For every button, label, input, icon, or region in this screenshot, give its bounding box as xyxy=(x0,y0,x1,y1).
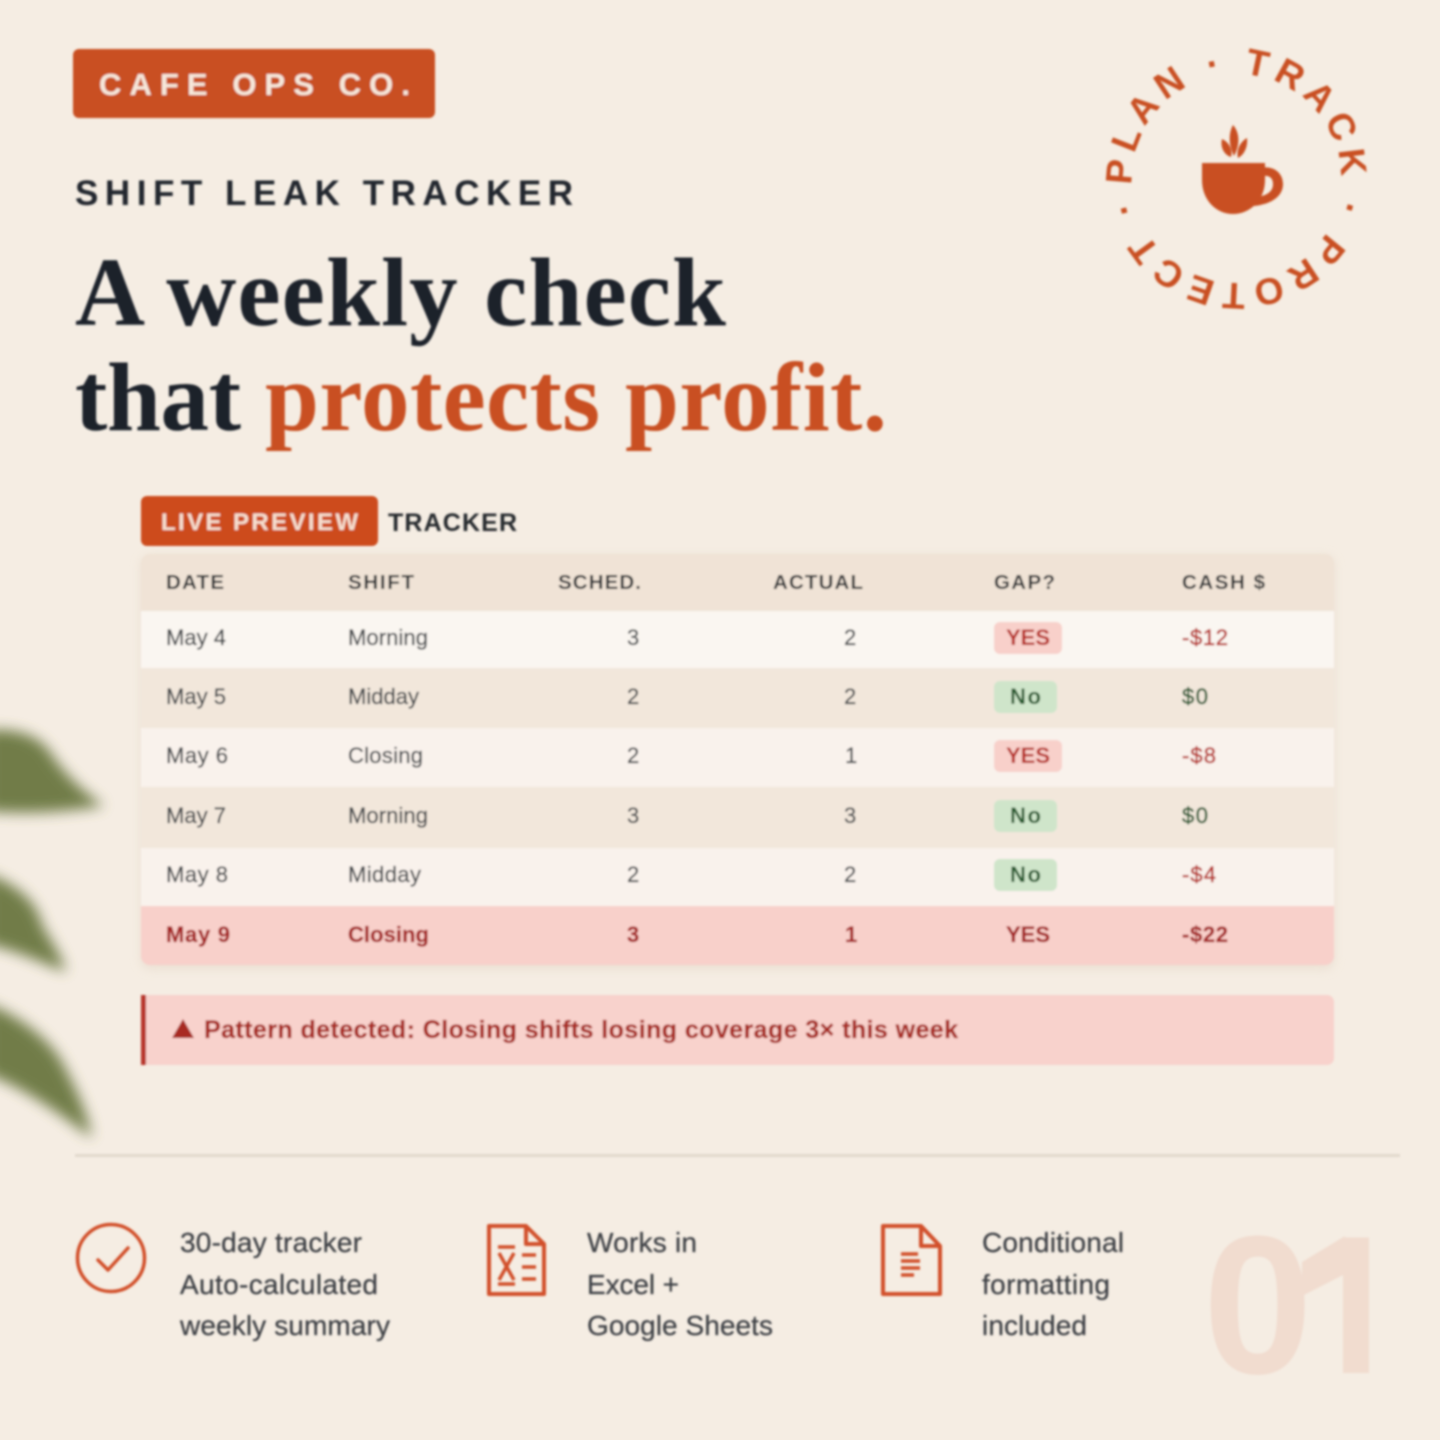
feature text xyxy=(179,1227,390,1341)
row May 4: Morning xyxy=(348,625,428,650)
table header xyxy=(166,571,1266,594)
row May 6: -$8 xyxy=(1182,743,1216,768)
icon: document file xyxy=(883,1226,940,1294)
row May 7: 3 xyxy=(627,803,639,828)
main title: A weekly check xyxy=(75,239,726,346)
row May 4 xyxy=(166,622,1228,654)
alert callout xyxy=(141,995,1334,1065)
feature: conditional formatting xyxy=(883,1226,1124,1341)
row May 8: No xyxy=(1010,862,1041,887)
row May 5: No xyxy=(1010,684,1041,709)
feature text: Google Sheets xyxy=(587,1310,773,1341)
row May 5: May 5 xyxy=(166,684,226,709)
row May 9 highlighted xyxy=(166,922,1228,947)
feature text xyxy=(587,1227,773,1341)
row May 5: Midday xyxy=(348,684,419,709)
row May 8: 2 xyxy=(844,862,856,887)
table header: SHIFT xyxy=(348,571,414,594)
live preview tab: LIVE PREVIEW xyxy=(161,509,358,536)
row May 8: -$4 xyxy=(1182,862,1216,887)
row May 4: 2 xyxy=(844,625,856,650)
feature text: Auto-calculated xyxy=(180,1269,378,1300)
row May 6: 1 xyxy=(845,743,857,768)
tracker label: TRACKER xyxy=(388,509,517,537)
row May 9 highlighted: 3 xyxy=(627,922,639,947)
brand badge xyxy=(73,49,435,118)
row May 5: $0 xyxy=(1182,684,1208,709)
row May 5: 2 xyxy=(627,684,639,709)
row May 9 highlighted: YES xyxy=(1006,922,1050,947)
row May 7: No xyxy=(1010,803,1041,828)
feature: excel and sheets xyxy=(489,1226,773,1341)
page number xyxy=(1203,1195,1406,1415)
row May 8: May 8 xyxy=(166,862,228,887)
row May 4: YES xyxy=(1006,625,1050,650)
table header: DATE xyxy=(166,571,224,594)
alert callout: Pattern detected: Closing shifts losing coverage 3× this week xyxy=(204,1016,958,1044)
row May 7: May 7 xyxy=(166,803,226,828)
row May 7: 3 xyxy=(844,803,856,828)
row May 7: $0 xyxy=(1182,803,1208,828)
row May 9 highlighted: May 9 xyxy=(166,922,230,947)
table header: CASH $ xyxy=(1182,571,1266,594)
icon: spreadsheet file xyxy=(489,1226,544,1294)
table header: GAP? xyxy=(994,571,1055,594)
feature text: Excel + xyxy=(587,1269,679,1300)
row May 9 highlighted: -$22 xyxy=(1182,922,1228,947)
feature text: 30-day tracker xyxy=(180,1227,362,1258)
table header: SCHED. xyxy=(558,571,641,594)
feature text: included xyxy=(982,1310,1087,1341)
row May 5: 2 xyxy=(844,684,856,709)
feature text: weekly summary xyxy=(179,1310,390,1341)
feature text: formatting xyxy=(982,1269,1110,1300)
table shadow xyxy=(141,556,1334,969)
icon: coffee cup xyxy=(1202,125,1283,214)
feature: tracker xyxy=(78,1224,390,1341)
row May 4: May 4 xyxy=(166,625,226,650)
feature text: Works in xyxy=(587,1227,697,1258)
eyebrow heading: SHIFT LEAK TRACKER xyxy=(75,174,573,213)
icon: check circle xyxy=(78,1224,144,1292)
row May 8: Midday xyxy=(348,862,421,887)
row May 4: 3 xyxy=(627,625,639,650)
row May 6: Closing xyxy=(348,743,423,768)
row May 9 highlighted: 1 xyxy=(845,922,857,947)
icon: warning triangle xyxy=(172,1019,194,1038)
stamp ring text: PLAN · TRACK · PROTECT · xyxy=(1104,47,1368,311)
page number: 0 xyxy=(1203,1195,1313,1415)
row May 6: May 6 xyxy=(166,743,228,768)
row May 4: -$12 xyxy=(1182,625,1228,650)
table header: ACTUAL xyxy=(773,571,863,594)
row May 6 xyxy=(166,740,1216,772)
main title xyxy=(75,239,887,451)
table row backgrounds xyxy=(141,554,1334,965)
circular stamp xyxy=(1104,47,1368,311)
row May 5 xyxy=(166,681,1208,713)
page number: 1 xyxy=(1296,1195,1406,1415)
row May 9 highlighted: Closing xyxy=(348,922,429,947)
tracker table xyxy=(141,554,1334,965)
brand badge: CAFE OPS CO. xyxy=(99,67,410,102)
feature text: Conditional xyxy=(982,1227,1124,1258)
row May 7: Morning xyxy=(348,803,428,828)
divider xyxy=(75,1154,1400,1157)
row May 7 xyxy=(166,800,1208,832)
row May 6: YES xyxy=(1006,743,1050,768)
row May 8: 2 xyxy=(627,862,639,887)
row May 8 xyxy=(166,859,1216,891)
feature text xyxy=(982,1227,1124,1341)
main title: that xyxy=(75,344,241,451)
blurred plant leaves xyxy=(0,730,104,1138)
live preview tab xyxy=(141,496,378,546)
main title: protects profit. xyxy=(265,344,887,451)
row May 6: 2 xyxy=(627,743,639,768)
